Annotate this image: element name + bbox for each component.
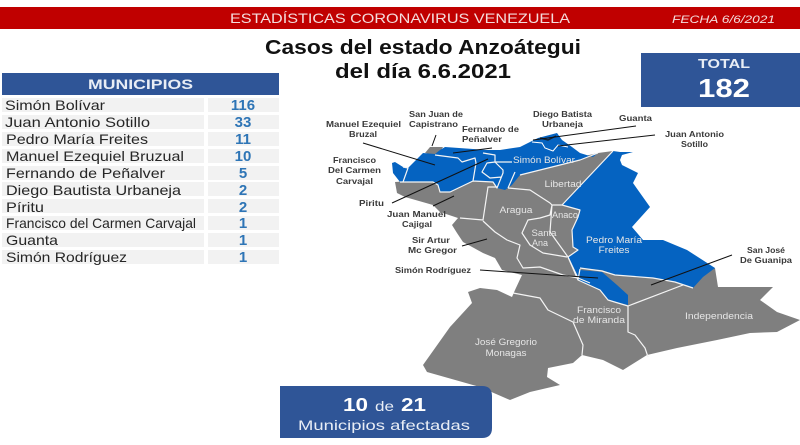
labels inside map: Francisco: [577, 305, 621, 315]
panel: municipios table: 11: [235, 131, 251, 148]
labels inside map: José Gregorio: [475, 337, 537, 347]
panel: municipios table: 1: [239, 249, 247, 266]
callout labels: Del Carmen: [328, 165, 381, 175]
San Juan de Capistrano: [425, 147, 443, 155]
callout labels: Bruzal: [349, 129, 377, 139]
callout labels: Juan Antonio: [665, 129, 724, 139]
callout labels: Manuel Ezequiel: [326, 119, 401, 129]
labels inside map: Santa: [532, 228, 556, 238]
panel: municipios table: Píritu: [6, 199, 44, 215]
labels inside map: Ana: [532, 238, 548, 248]
callout labels: Mc Gregor: [408, 245, 458, 255]
panel: total cases: TOTAL: [698, 56, 750, 71]
panel: municipios table: [2, 73, 279, 266]
panel: municipios table: Pedro María Freites: [6, 131, 148, 147]
labels inside map: Independencia: [685, 311, 753, 321]
panel: municipios table: Juan Antonio Sotillo: [5, 114, 150, 130]
callout labels: Juan Manuel: [387, 209, 446, 219]
callout labels: Fernando de: [462, 124, 519, 134]
callout labels: Cajigal: [402, 219, 432, 229]
labels inside map: [475, 155, 753, 358]
panel: municipios afectadas: Municipios afectadas: [298, 417, 470, 433]
panel: municipios table: Simón Bolívar: [5, 97, 105, 113]
municipal borders: [400, 136, 693, 357]
panel: municipios afectadas: 21: [401, 395, 426, 415]
panel: municipios table: Guanta: [6, 232, 58, 248]
panel: total cases: [641, 53, 800, 107]
panel: municipios afectadas: 10: [343, 395, 368, 415]
panel: municipios table: 10: [235, 148, 251, 165]
panel: municipios table: Fernando de Peñalver: [6, 165, 165, 181]
callout labels: Simón Rodríguez: [395, 265, 471, 275]
panel: municipios afectadas: [280, 386, 492, 438]
labels inside map: Monagas: [486, 348, 527, 358]
panel: municipios afectadas: de: [375, 398, 394, 414]
callout labels: San José: [747, 245, 785, 255]
panel: municipios table: 2: [239, 199, 247, 216]
panel: municipios table: 1: [239, 215, 247, 232]
labels inside map: Simón Bolívar: [513, 155, 575, 165]
title: [265, 37, 581, 83]
map of Anzoátegui: [326, 109, 800, 400]
blue municipalities: [392, 133, 598, 192]
panel: municipios table: 2: [239, 182, 247, 199]
panel: municipios table: 33: [235, 114, 251, 131]
labels inside map: de Miranda: [573, 315, 625, 325]
panel: total cases: 182: [698, 73, 750, 103]
panel: municipios table: 116: [231, 97, 255, 114]
gray municipalities: [395, 151, 800, 400]
labels inside map: Freites: [598, 245, 630, 255]
header bar: [0, 7, 800, 29]
panel: municipios table: Manuel Ezequiel Bruzual: [6, 148, 184, 164]
panel: municipios table: MUNICIPIOS: [88, 76, 193, 92]
callout labels: Guanta: [619, 113, 652, 123]
callout labels: Sotillo: [681, 139, 708, 149]
callout labels: San Juan de: [409, 109, 463, 119]
labels inside map: Aragua: [500, 205, 532, 215]
panel: municipios table: Diego Bautista Urbaneja: [6, 182, 181, 198]
callout labels: Piritu: [359, 198, 384, 208]
callout labels: Diego Batista: [533, 109, 592, 119]
labels inside map: Anaco: [552, 210, 578, 220]
header bar: FECHA 6/6/2021: [672, 14, 775, 26]
labels inside map: Libertad: [544, 179, 582, 189]
panel: municipios table: Simón Rodríguez: [6, 249, 127, 265]
callout labels: Carvajal: [336, 176, 373, 186]
callout labels: Peñalver: [462, 134, 503, 144]
callout labels: De Guanipa: [740, 255, 792, 265]
callout labels: Urbaneja: [542, 119, 583, 129]
panel: municipios table: Francisco del Carmen Carvajal: [6, 215, 196, 231]
callout labels: Capistrano: [409, 119, 458, 129]
Pedro María Freites: [562, 148, 715, 288]
panel: municipios table: 5: [239, 165, 247, 182]
panel: municipios table: 1: [239, 232, 247, 249]
Simón Rodríguez: [578, 270, 628, 305]
title: Casos del estado Anzoátegui: [265, 37, 581, 59]
title: del día 6.6.2021: [335, 61, 511, 83]
header bar: ESTADÍSTICAS CORONAVIRUS VENEZUELA: [230, 10, 571, 26]
callout labels: [326, 109, 792, 275]
leader lines: [363, 126, 732, 285]
callout labels: Francisco: [333, 155, 376, 165]
labels inside map: Pedro María: [586, 235, 642, 245]
callout labels: Sir Artur: [412, 235, 451, 245]
